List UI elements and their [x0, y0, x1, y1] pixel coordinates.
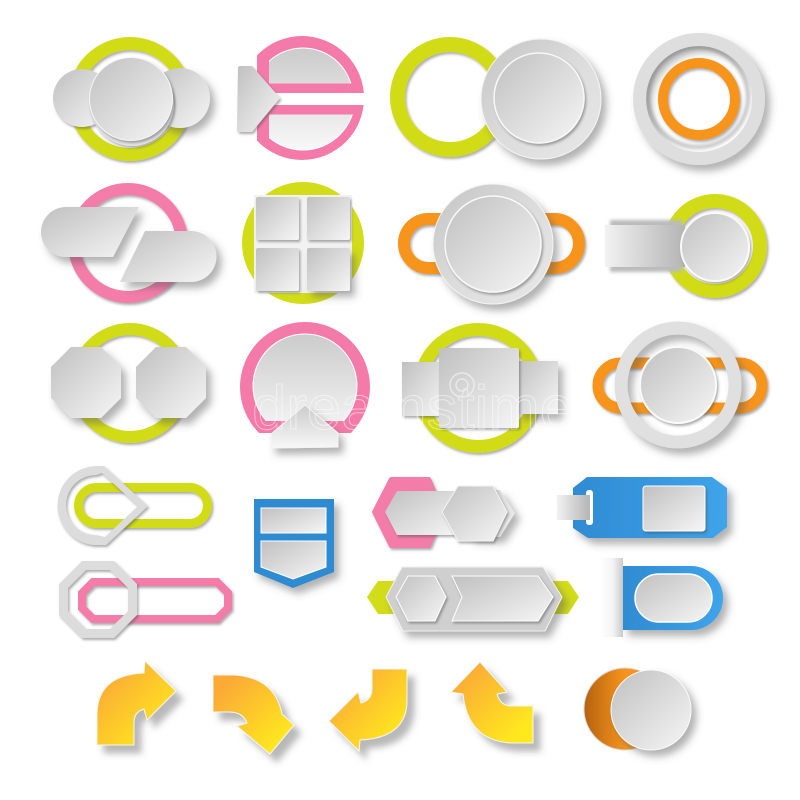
- lime disc: [242, 182, 364, 304]
- long hexagon: [452, 576, 553, 621]
- square top right: [307, 197, 350, 240]
- icon: blue shield: [254, 499, 334, 588]
- icon: lime hexagon with double panel: [367, 567, 579, 631]
- arrow: curved up: [451, 662, 533, 743]
- orange pill: [404, 219, 579, 268]
- icon: pink open ring with arrow tab: [240, 322, 370, 452]
- grey triangle tab: [237, 66, 280, 132]
- disc: [640, 347, 716, 423]
- grey ring: [621, 328, 735, 442]
- left panel: [402, 362, 442, 416]
- orange ring: [663, 63, 735, 135]
- icon: lime ring with three discs: [53, 44, 210, 154]
- icon: lime ring with square panels: [402, 330, 558, 446]
- pink ring: [74, 189, 182, 297]
- arrow tab: [271, 405, 338, 448]
- disc: [681, 213, 749, 281]
- top panel: [261, 508, 326, 533]
- icon: orange crescent with disc: [584, 668, 691, 750]
- bottom panel: [261, 541, 326, 579]
- lime pill: [78, 488, 208, 524]
- arrow: curved left: [329, 669, 407, 751]
- right panel: [517, 361, 558, 414]
- inner disc: [445, 196, 541, 292]
- pointed grey ring: [58, 466, 148, 545]
- lime ring: [76, 329, 184, 437]
- grey band: [605, 225, 685, 267]
- icon: blue tag: [557, 477, 727, 538]
- icon: lime ring with plate: [398, 39, 601, 159]
- orange pill: [598, 363, 762, 408]
- back hexagon: [470, 490, 515, 537]
- left disc: [53, 69, 111, 127]
- pink disc: [240, 322, 370, 433]
- pink upper half: [257, 36, 364, 93]
- icon: lime disc with four squares: [242, 182, 364, 304]
- strap: [557, 495, 590, 520]
- lower shadow disc: [90, 62, 174, 146]
- long grey hexagon: [385, 491, 460, 535]
- blue half pill: [623, 566, 723, 630]
- square top left: [256, 197, 299, 240]
- grey lower segment: [269, 114, 353, 150]
- icon: blue half pill: [600, 558, 723, 637]
- arrow: curved right: [97, 661, 176, 745]
- outer plate: [433, 184, 553, 304]
- pink lower half: [257, 105, 364, 160]
- outer plate: [481, 39, 601, 159]
- square bottom right: [307, 248, 350, 291]
- grey disc: [252, 334, 358, 421]
- grey pill: [635, 574, 712, 622]
- slot: [586, 490, 593, 525]
- icon: orange pill through grey ring: [598, 328, 762, 442]
- front hexagon: [442, 486, 507, 541]
- inner ring shadow: [648, 47, 748, 147]
- lime ring: [670, 201, 760, 291]
- centre disc: [90, 58, 172, 140]
- lime ring: [398, 44, 502, 150]
- arrow: curved down: [213, 675, 294, 754]
- icon: pink split circle with triangle: [237, 36, 364, 160]
- grey ring: [640, 40, 758, 158]
- grey disc: [611, 670, 691, 750]
- label panel: [643, 486, 705, 531]
- pink hexagon: [374, 479, 443, 546]
- lime ring: [420, 330, 536, 446]
- icon: pink octagon pill with grey octagon ring: [59, 561, 228, 638]
- grey plate: [386, 567, 562, 631]
- white cross backing: [254, 195, 352, 293]
- icon: pink hexagon with grey hexagons: [374, 479, 515, 546]
- grey upper segment: [269, 48, 352, 84]
- white side strip: [600, 558, 623, 637]
- lime hexagon: [367, 581, 579, 614]
- left pill: [41, 207, 139, 257]
- pink pill: [82, 582, 228, 619]
- band shadow: [610, 220, 682, 272]
- shield base: [254, 499, 334, 588]
- square bottom left: [256, 248, 299, 291]
- icon: orange ring in grey ring: [640, 40, 758, 158]
- tag body: [573, 477, 727, 538]
- orange disc: [584, 668, 666, 750]
- right pill: [120, 231, 216, 282]
- grey octagon ring: [59, 561, 137, 638]
- lime ring: [74, 44, 186, 154]
- icon: lime ring with two octagons: [51, 329, 206, 437]
- watermark: dreamstime: [252, 374, 574, 443]
- icon: pink ring with two parallelogram pills: [41, 189, 216, 297]
- icon: plate with orange handles: [404, 184, 579, 304]
- left octagon: [51, 347, 121, 418]
- inner disc: [494, 53, 584, 143]
- right disc: [150, 68, 210, 128]
- centre panel: [439, 348, 519, 428]
- right octagon: [136, 347, 206, 418]
- small hexagon: [396, 576, 446, 621]
- icon: lime pill with pointed ring: [58, 466, 208, 545]
- icon: lime ring with grey band: [605, 201, 760, 291]
